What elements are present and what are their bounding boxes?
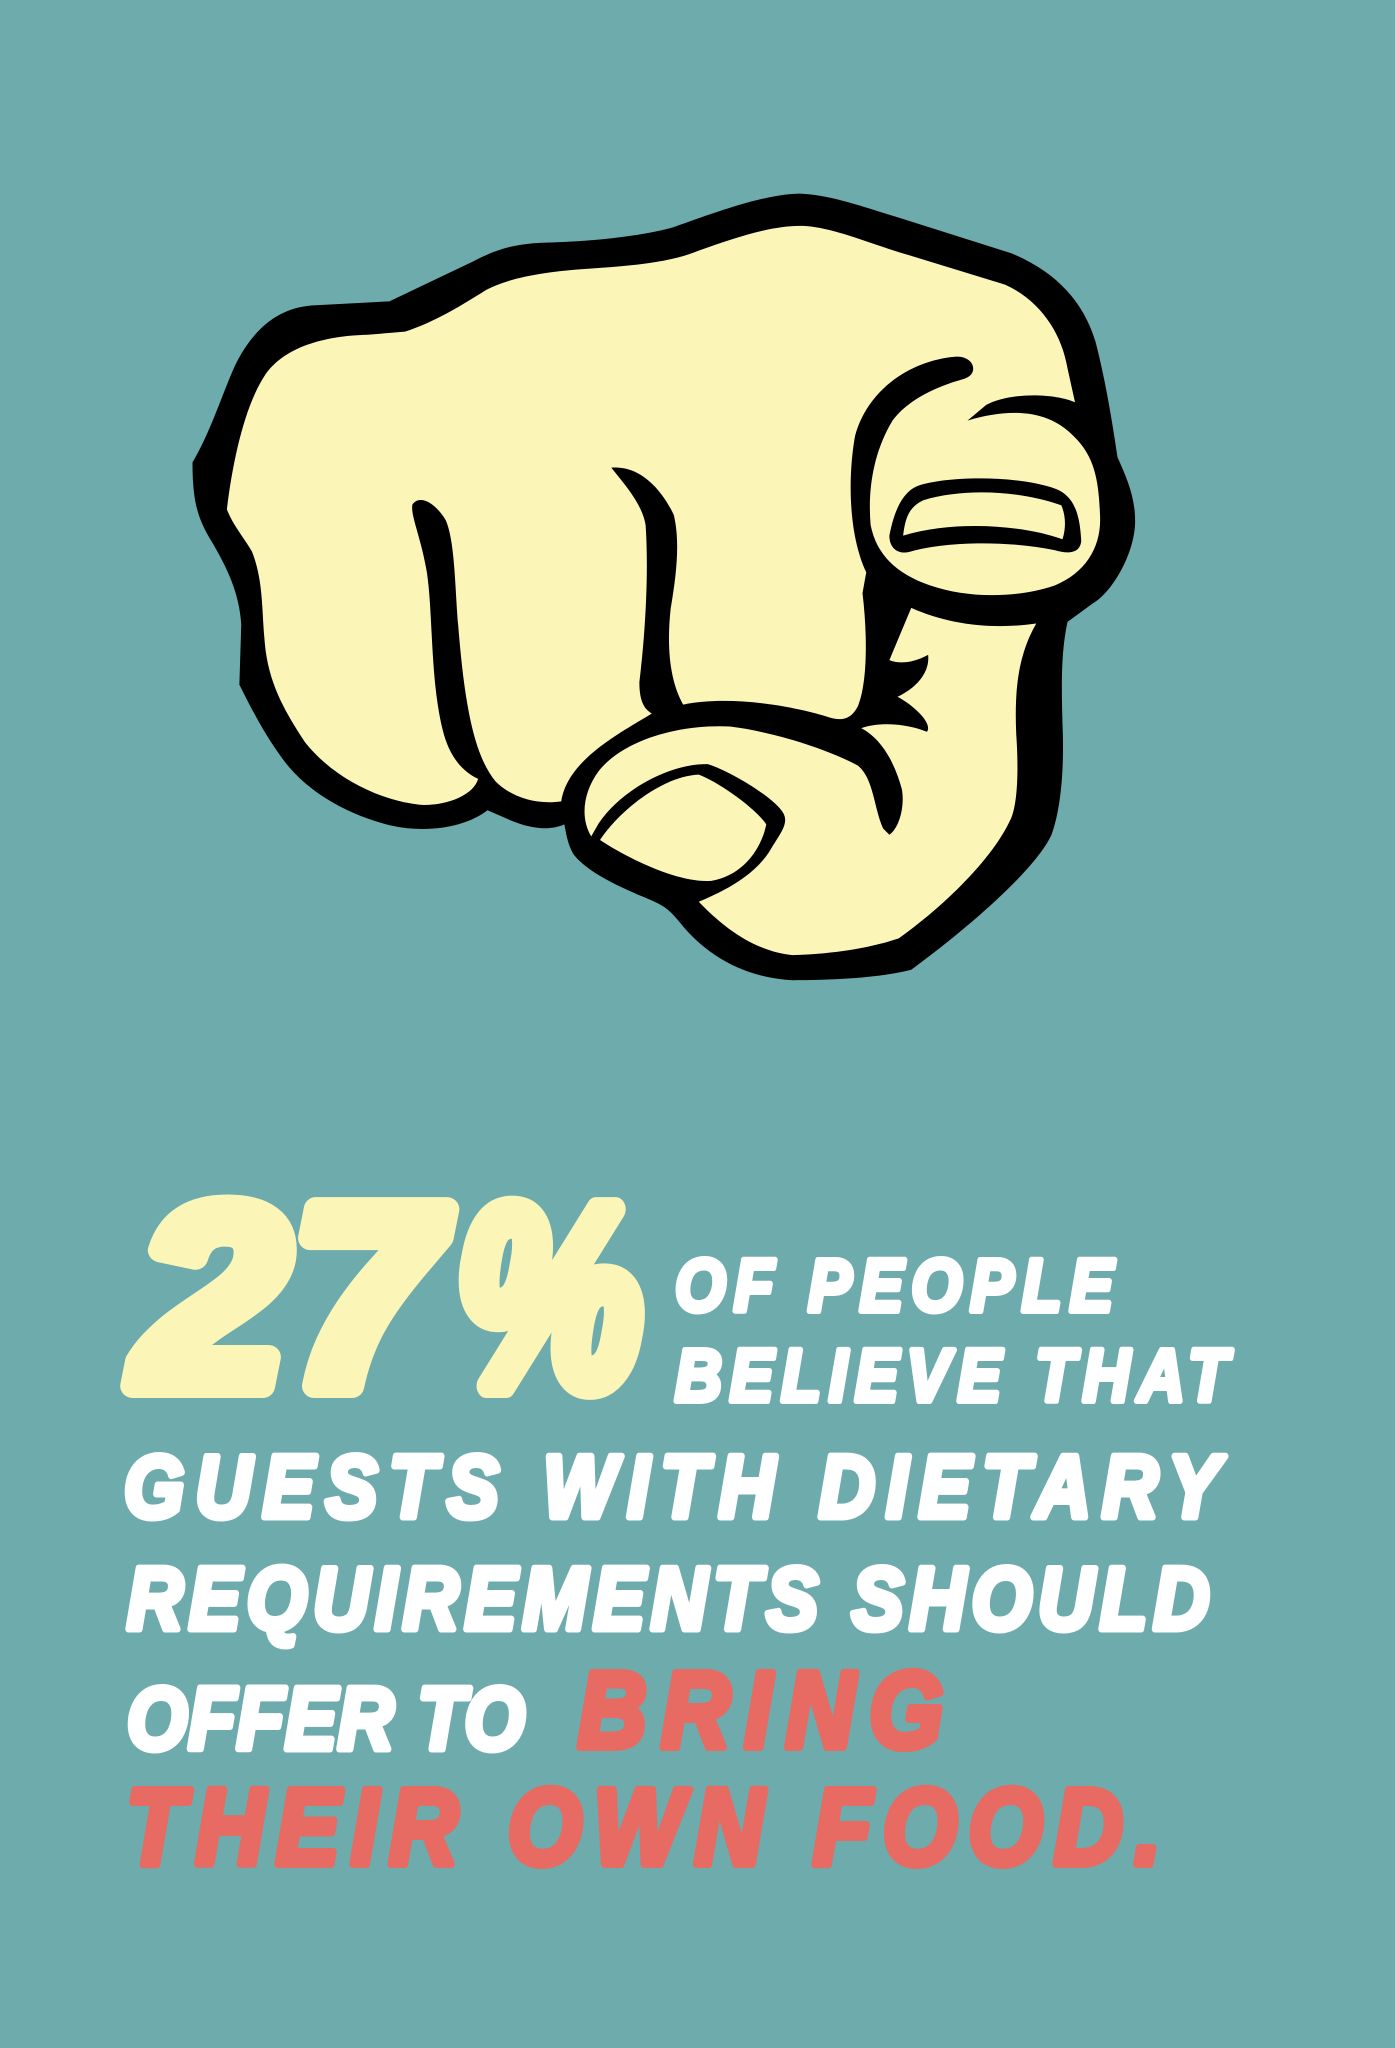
text: guests with dietary: GUESTS WITH DIETARY bbox=[124, 1437, 1226, 1536]
text: offer to: OFFER TO bbox=[127, 1669, 525, 1768]
text: requirements should: REQUIREMENTS SHOULD bbox=[127, 1549, 1209, 1648]
hand black silhouette bbox=[192, 194, 1135, 980]
text: believe that: BELIEVE THAT bbox=[675, 1334, 1233, 1417]
fingernail outline bbox=[889, 478, 1081, 553]
fist and fingertip fill bbox=[227, 226, 1100, 805]
statistic: 27%: 7 bbox=[292, 1154, 451, 1441]
statistic: 27%: 2 bbox=[133, 1154, 287, 1441]
fingernail fill bbox=[903, 492, 1065, 539]
statistic: 27% bbox=[133, 1154, 641, 1441]
text: of people: OF PEOPLE bbox=[675, 1244, 1116, 1327]
icon: pointing hand bbox=[192, 194, 1135, 980]
pointing finger fill bbox=[585, 608, 1036, 955]
statistic: 27%: % bbox=[457, 1154, 641, 1441]
text: their own food: THEIR OWN FOOD. bbox=[126, 1766, 1161, 1887]
thumbnail bbox=[600, 775, 766, 881]
text: bring: BRING bbox=[578, 1649, 943, 1770]
